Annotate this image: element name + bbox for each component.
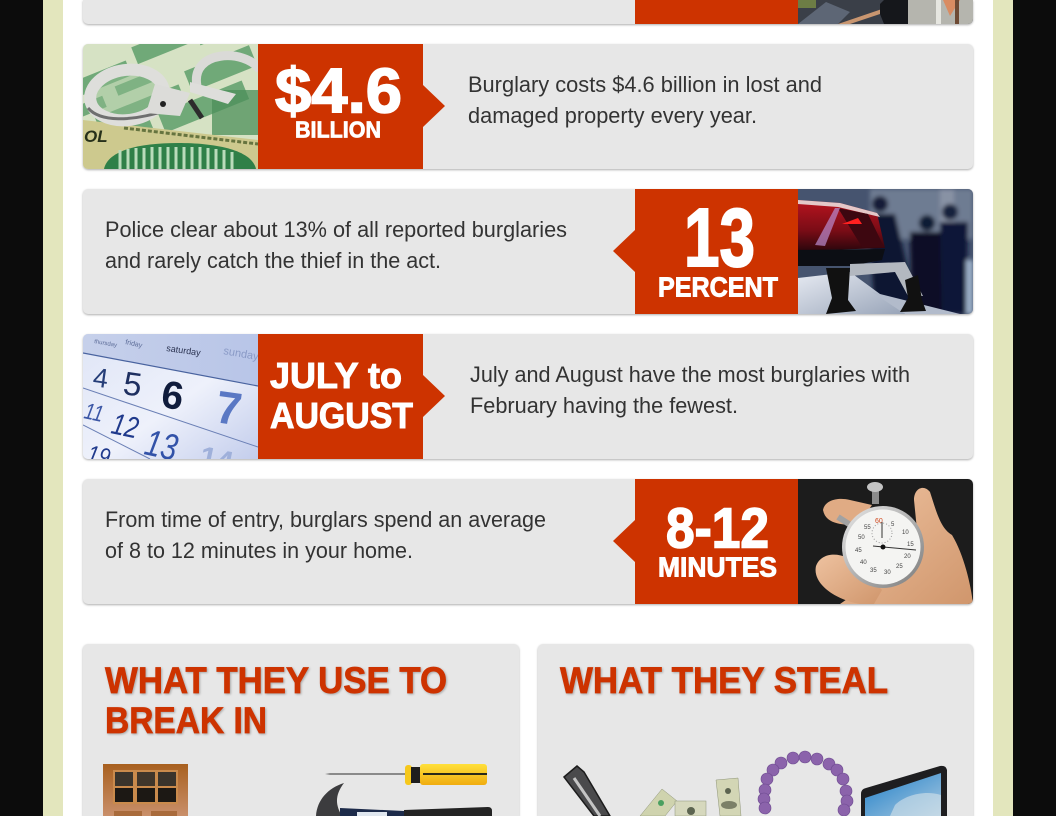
panel: 4.6 billion fact	[82, 44, 974, 172]
panel: what they use to break in	[83, 644, 519, 816]
text: burglary cost: damaged property every year.	[468, 103, 757, 128]
photo: stopwatch in hand: 20	[904, 554, 911, 560]
icon: hammer	[316, 783, 492, 816]
icon: purple bead bracelet	[758, 751, 853, 816]
panel: what they steal	[538, 644, 973, 816]
photo: stopwatch in hand: 45	[855, 548, 862, 554]
text: time in home: of 8 to 12 minutes in your home.	[105, 538, 413, 563]
photo: stopwatch in hand	[798, 479, 973, 604]
photo: calendar: sunday	[222, 345, 260, 363]
panel: July to August fact	[82, 334, 974, 462]
photo: calendar: thursday	[94, 339, 117, 349]
text: time in home: From time of entry, burglars spend an average	[105, 507, 546, 532]
text: time in home	[105, 507, 546, 563]
badge: July to August: JULY to	[270, 355, 402, 396]
photo: stopwatch in hand: 55	[864, 525, 871, 531]
photo: stopwatch in hand: 40	[860, 560, 867, 566]
text: busiest months: July and August have the most burglaries with	[470, 362, 910, 387]
badge: $4.6 billion: BILLION	[295, 116, 381, 142]
icon: screwdriver	[325, 764, 487, 785]
photo: calendar: 7	[213, 380, 245, 435]
icon: laptop	[861, 766, 947, 816]
heading: what they steal: WHAT THEY STEAL	[560, 660, 888, 701]
badge: 13 percent	[613, 189, 798, 314]
badge: $4.6 billion: $4.6	[275, 56, 402, 126]
text: clearance rate	[105, 217, 567, 273]
photo: stopwatch in hand: 15	[907, 542, 914, 548]
heading: what they use to break in	[105, 660, 447, 741]
photo: stopwatch in hand: 60	[875, 518, 883, 525]
photo: calendar: 6	[159, 373, 186, 419]
photo: calendar: saturday	[166, 343, 202, 358]
text: burglary cost	[468, 72, 822, 128]
icon: handgun	[564, 766, 610, 816]
photo: handcuffs on money	[83, 44, 258, 169]
panel: 8-12 minutes fact	[83, 479, 973, 604]
text: clearance rate: and rarely catch the thief in the act.	[105, 248, 441, 273]
photo: stopwatch in hand: 10	[902, 530, 909, 536]
photo: calendar: 4	[91, 362, 110, 394]
text: busiest months	[470, 362, 910, 418]
photo: calendar: friday	[125, 339, 143, 350]
photo: police car light	[798, 189, 973, 314]
photo: burglar with crowbar	[798, 0, 973, 24]
text: clearance rate: Police clear about 13% of all reported burglaries	[105, 217, 567, 242]
badge: 13 percent: PERCENT	[658, 272, 778, 302]
photo: stopwatch in hand: 50	[858, 535, 865, 541]
badge: 8-12 minutes: 8-12	[666, 496, 769, 560]
badge: 8-12 minutes: MINUTES	[658, 552, 777, 582]
icon: wooden door	[103, 764, 188, 816]
panel: top cropped burglar fact	[83, 0, 973, 24]
photo: stopwatch in hand: 25	[896, 564, 903, 570]
photo: calendar: 5	[121, 364, 144, 403]
photo: calendar	[83, 334, 258, 459]
badge: 13 percent: 13	[684, 191, 755, 284]
text: burglary cost: Burglary costs $4.6 billion in lost and	[468, 72, 822, 97]
badge: $4.6 billion	[258, 44, 445, 169]
photo: calendar: 11	[82, 399, 106, 427]
photo: calendar: 19	[85, 440, 113, 471]
photo: calendar: 12	[109, 406, 142, 445]
heading: what they use to break in: WHAT THEY USE TO	[105, 660, 447, 701]
photo: calendar: 13	[141, 422, 182, 469]
photo: stopwatch in hand: 5	[891, 522, 895, 528]
photo: stopwatch in hand: 35	[870, 568, 877, 574]
text: busiest months: February having the fewest.	[470, 393, 738, 418]
badge: July to August: AUGUST	[270, 395, 413, 436]
photo: calendar: 14	[197, 441, 236, 480]
panel: 13 percent fact	[83, 189, 973, 314]
badge: July to August	[258, 334, 445, 459]
badge: 8-12 minutes	[613, 479, 798, 604]
text on banknote corner: OL	[84, 127, 108, 146]
photo: stopwatch in hand: 30	[884, 570, 891, 576]
icon: cash	[640, 778, 741, 816]
heading: what they use to break in: BREAK IN	[105, 700, 267, 741]
